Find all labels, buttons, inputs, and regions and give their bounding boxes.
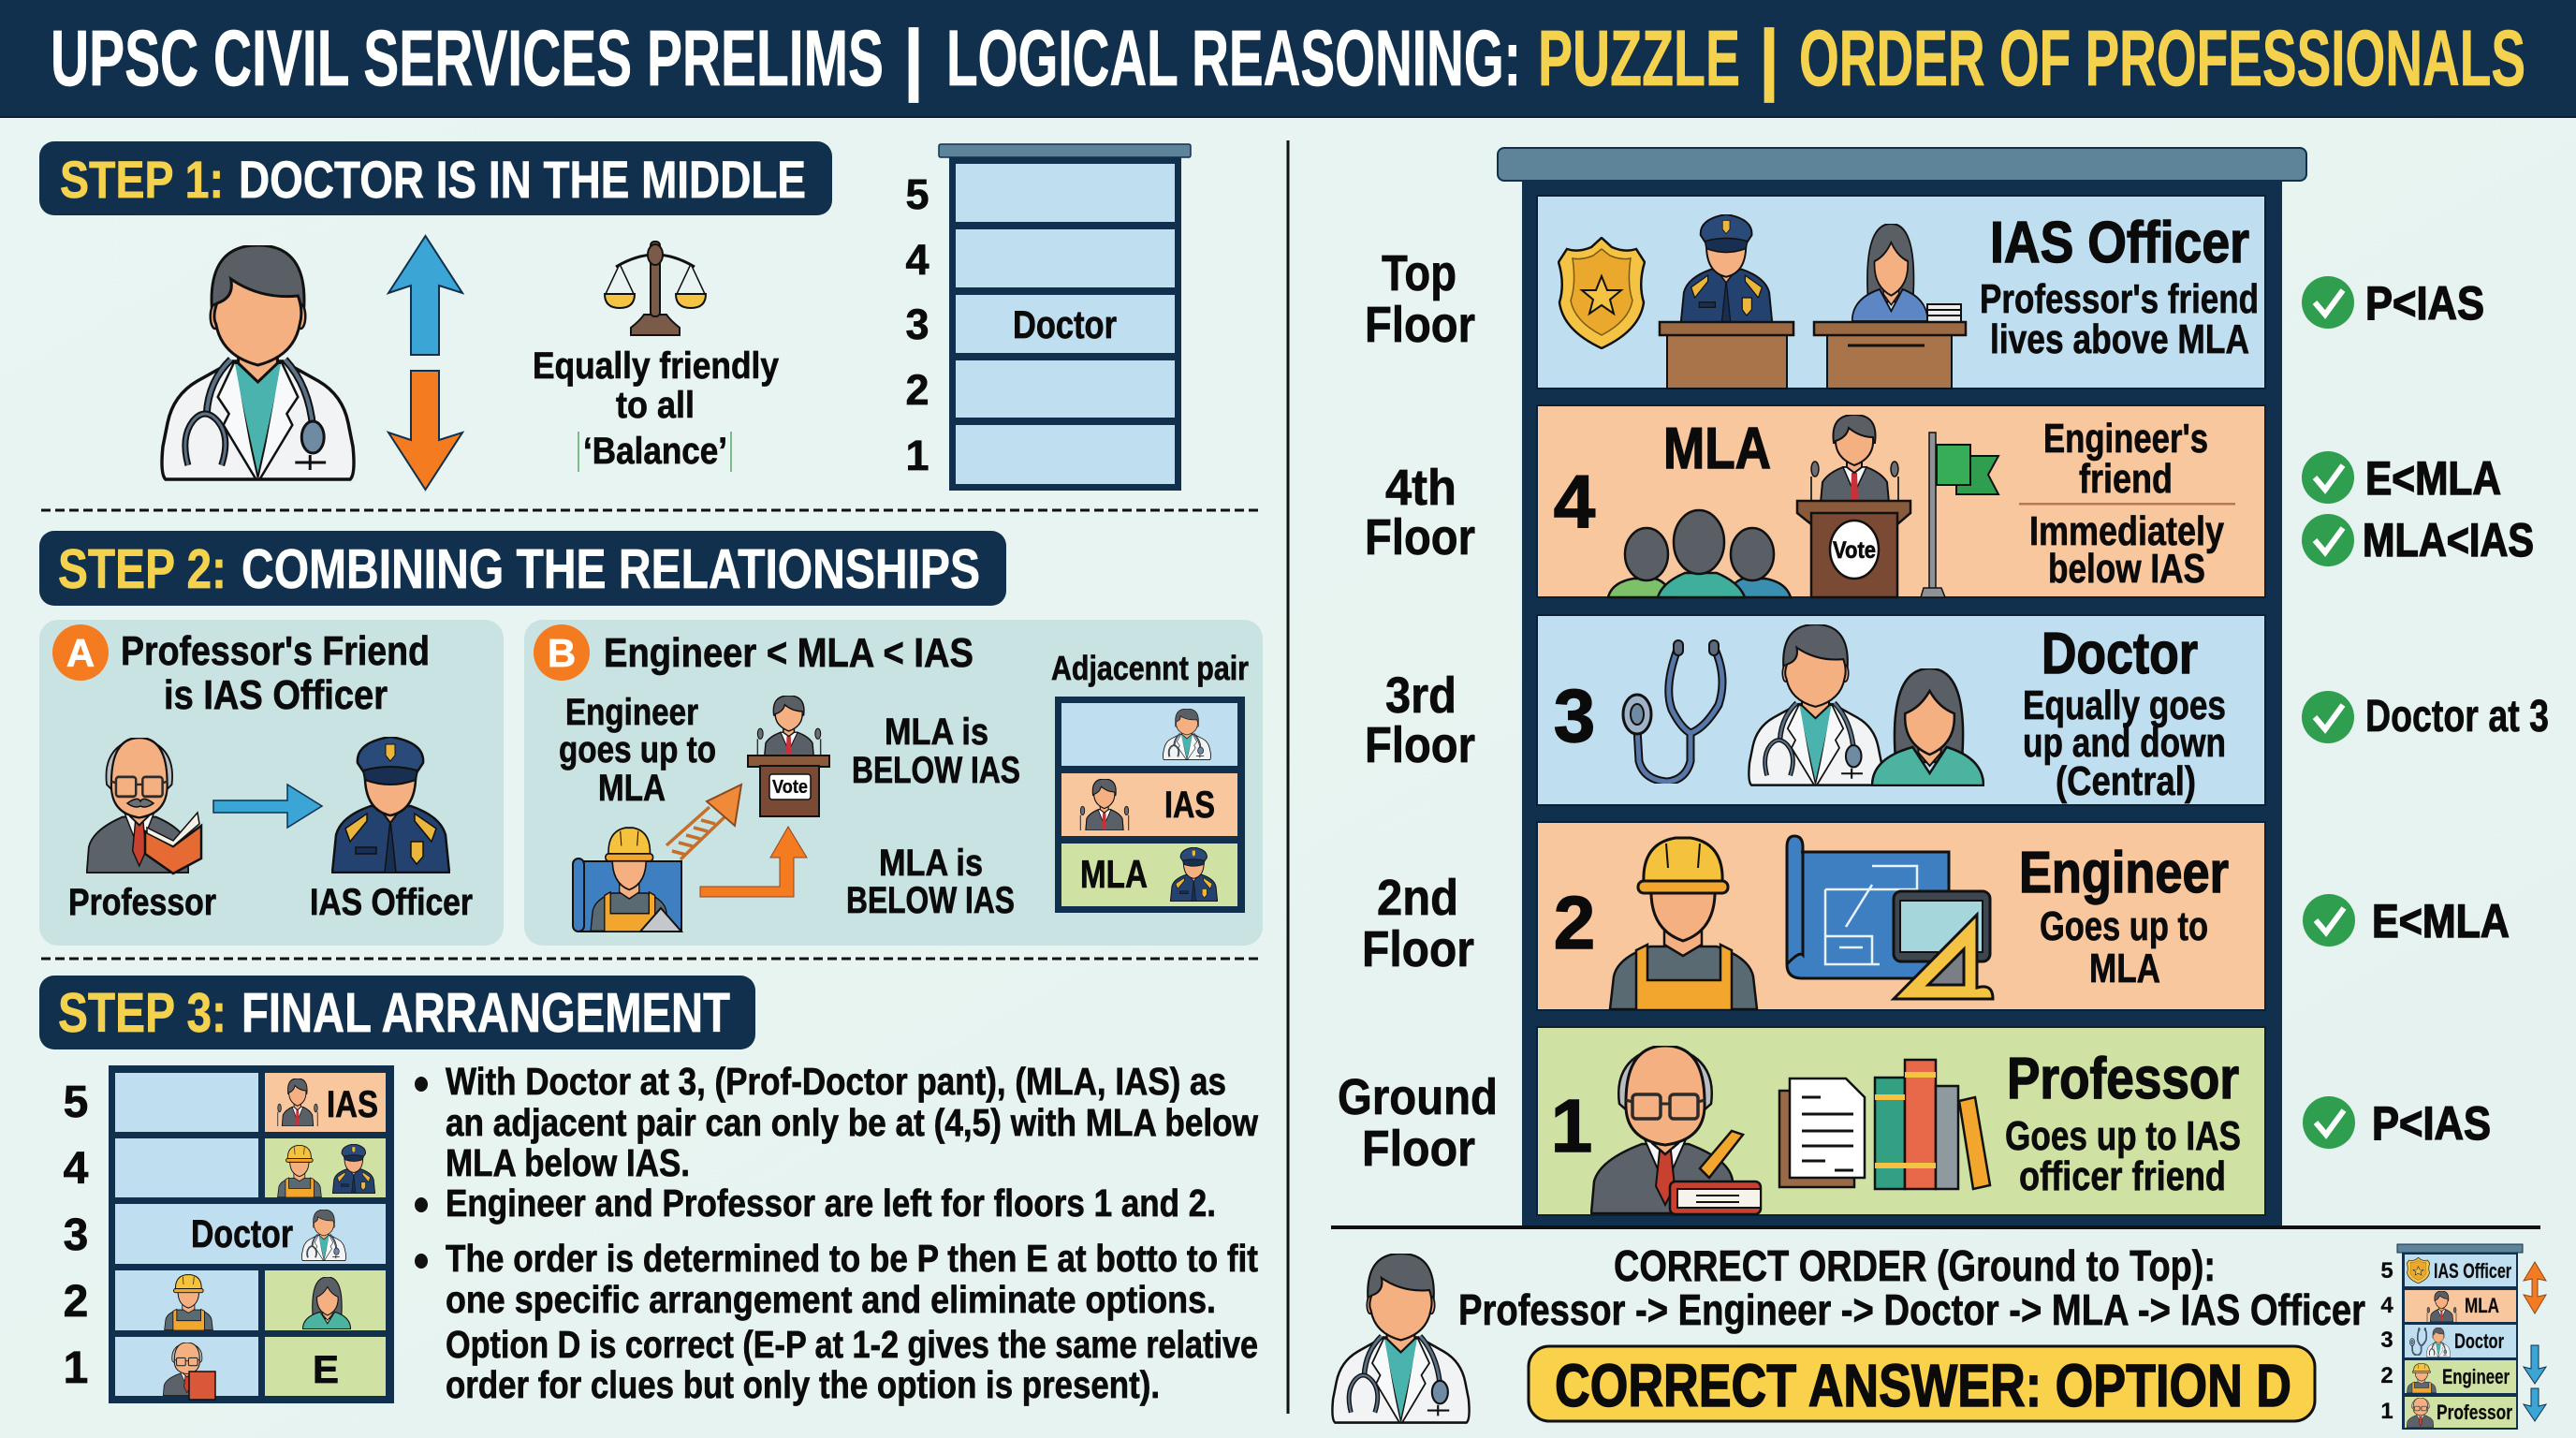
floor 5 text: Professor's friend — [1980, 276, 2259, 322]
icon: doctor — [1749, 624, 1882, 785]
icon: engineer — [1610, 838, 1757, 1010]
icon: IAS officer — [332, 737, 449, 873]
explanation text: one specific arrangement and eliminate options. — [446, 1278, 1216, 1321]
arrow: down — [388, 371, 462, 490]
text: MLA below IAS repeated: BELOW IAS — [846, 880, 1015, 921]
check: E less than MLA second — [2303, 894, 2510, 947]
title banner: UPSC CIVIL SERVICES PRELIMS — [51, 14, 884, 102]
floor 3 text: Doctor — [2042, 622, 2198, 686]
explanation text: MLA below IAS. — [446, 1141, 690, 1184]
floor label: 4th — [1365, 460, 1475, 565]
panel A: professor's friend — [39, 620, 504, 946]
building: tower structure — [1498, 148, 2306, 1227]
check: MLA less than IAS — [2302, 514, 2534, 566]
floor 5: IAS officer — [1537, 196, 2265, 389]
mini building summary — [2380, 1244, 2523, 1430]
floor label: 3rd: Floor — [1365, 717, 1475, 773]
floor 3 text: Equally goes — [2023, 682, 2226, 728]
icon: MLA at podium — [748, 696, 829, 816]
mini building summary: 5 — [2380, 1258, 2393, 1284]
icon: paper — [1779, 1078, 1865, 1187]
explanation text: Option D is correct (E-P at 1-2 gives the same relative — [446, 1323, 1258, 1366]
floor chart: doctor at floor 3: 3 — [905, 301, 929, 348]
panel B: engineer, MLA, IAS — [524, 620, 1263, 946]
check: P less than IAS — [2302, 276, 2484, 330]
text: engineer goes up: Engineer — [565, 692, 698, 733]
badge B — [534, 624, 590, 681]
floor 1 text: officer friend — [2019, 1153, 2226, 1199]
final arrangement grid: 4 — [64, 1144, 89, 1194]
arrow: to MLA — [700, 827, 807, 897]
icon: engineer with blueprint — [573, 828, 681, 932]
floor 2 text: Engineer — [2019, 841, 2229, 905]
adjacent pair chart: MLA — [1080, 852, 1148, 896]
floor 4 text: Immediately — [2029, 508, 2224, 554]
mini building summary: 4 — [2380, 1293, 2393, 1318]
text: engineer goes up — [559, 692, 716, 809]
floor 4 text — [2019, 416, 2235, 592]
floor label: 3rd — [1365, 668, 1475, 773]
step 2 heading: COMBINING THE RELATIONSHIPS — [242, 538, 980, 600]
title banner: | — [903, 14, 924, 103]
heading A: is IAS Officer — [164, 672, 388, 718]
number 1: 1 — [1551, 1084, 1592, 1167]
icon: MLA at podium with vote — [1797, 415, 1910, 597]
text: equally friendly to all — [533, 345, 780, 472]
floor 3 text: (Central) — [2056, 758, 2196, 804]
floor chart: doctor at floor 3: 1 — [905, 432, 929, 479]
correct answer callout: CORRECT ANSWER: OPTION D — [1555, 1352, 2291, 1419]
floor label: 2nd: 2nd — [1377, 870, 1458, 926]
floor chart: doctor at floor 3: Doctor — [1013, 302, 1117, 346]
final arrangement grid: IAS — [327, 1084, 378, 1125]
label: professor: Professor — [68, 882, 216, 923]
title banner: | — [1759, 14, 1779, 103]
arrow: professor to IAS — [213, 785, 322, 828]
mini building summary: Doctor — [2454, 1329, 2504, 1353]
check: E less than MLA: E<MLA — [2365, 452, 2501, 505]
mini building summary: 1 — [2380, 1399, 2393, 1424]
title banner: LOGICAL REASONING: — [946, 14, 1521, 102]
floor 4 text: Engineer's — [2043, 416, 2208, 462]
arrow: double orange — [2524, 1262, 2546, 1313]
correct order text: CORRECT ORDER (Ground to Top): — [1614, 1241, 2216, 1290]
final arrangement grid — [64, 1065, 394, 1403]
adjacent pair chart: IAS — [1164, 785, 1215, 826]
check: MLA less than IAS: MLA<IAS — [2363, 514, 2534, 566]
floor label: ground — [1338, 1069, 1498, 1177]
floor 2: engineer — [1537, 822, 2265, 1010]
correct order text: Professor -> Engineer -> Doctor -> MLA -> IAS Officer — [1458, 1285, 2365, 1334]
floor 4 text: friend — [2079, 456, 2173, 502]
floor 1: professor — [1537, 1027, 2265, 1215]
arrow: up — [388, 236, 462, 355]
floor 2 text — [2019, 841, 2229, 991]
icon: books — [1875, 1060, 1990, 1189]
floor label: 2nd — [1362, 870, 1474, 977]
floor 5 text: IAS Officer — [1990, 211, 2249, 275]
mini building summary: Engineer — [2442, 1365, 2510, 1388]
correct order text — [1458, 1241, 2365, 1334]
mini building summary: MLA — [2465, 1294, 2499, 1317]
check: P less than IAS second — [2303, 1096, 2491, 1150]
floor label: 3rd: 3rd — [1385, 668, 1456, 724]
text: equally friendly to all: ‘Balance’ — [583, 431, 727, 472]
label: adjacent pair: Adjacennt pair — [1051, 649, 1249, 687]
heading B: Engineer < MLA < IAS — [604, 630, 973, 676]
text: engineer goes up: goes up to — [559, 729, 716, 770]
step 1 heading — [39, 141, 832, 215]
floor 5 text — [1980, 211, 2259, 362]
heading A: Professor's Friend — [121, 628, 430, 674]
floor chart: doctor at floor 3: 2 — [905, 366, 929, 414]
text: equally friendly to all: to all — [616, 385, 695, 426]
icon: professor with book — [87, 738, 201, 873]
icon: audience — [1608, 510, 1791, 597]
icon: woman — [1872, 668, 1983, 785]
floor 3: doctor — [1537, 615, 2265, 805]
final arrangement grid: Doctor — [191, 1211, 293, 1255]
icon: woman at desk — [1814, 224, 1966, 389]
explanation text: Engineer and Professor are left for floors 1 and 2. — [446, 1181, 1216, 1225]
floor chart: doctor at floor 3: 5 — [905, 170, 929, 218]
step 1 heading: STEP 1: — [60, 150, 224, 209]
step 2 heading: STEP 2: — [58, 538, 227, 600]
text: MLA below IAS — [852, 712, 1020, 791]
arrow: blue down upper — [2524, 1345, 2546, 1384]
text: engineer goes up: MLA — [598, 768, 666, 809]
explanation text: With Doctor at 3, (Prof-Doctor pant), (MLA, IAS) as — [446, 1060, 1226, 1103]
adjacent pair chart — [1055, 697, 1245, 913]
floor 3 text — [2023, 622, 2226, 804]
arrow: blue down lower — [2524, 1388, 2546, 1421]
badge A — [52, 624, 109, 681]
icon: MLA at podium with vote: Vote — [1833, 537, 1876, 564]
icon: flag — [1921, 433, 1998, 597]
icon: IAS officer at desk — [1660, 214, 1793, 389]
floor 4 text: below IAS — [2048, 546, 2205, 592]
floor 4: MLA — [1537, 405, 2265, 597]
icon: professor with book and pencil — [1591, 1046, 1761, 1214]
mini building summary: 2 — [2380, 1363, 2393, 1388]
final arrangement grid: 3 — [64, 1211, 88, 1260]
check: doctor at 3 — [2302, 691, 2549, 743]
explanation text — [415, 1060, 1258, 1406]
icon: doctor — [162, 245, 354, 479]
heading A — [121, 628, 430, 718]
icon: balance scale — [605, 242, 706, 335]
mini building summary: 3 — [2380, 1328, 2393, 1353]
number 2: 2 — [1554, 881, 1595, 964]
floor label: top: Floor — [1365, 297, 1475, 353]
icon: MLA at podium: Vote — [772, 777, 808, 798]
floor 1 text — [2005, 1047, 2241, 1199]
floor chart: doctor at floor 3: 4 — [905, 236, 929, 284]
floor 3 text: up and down — [2023, 720, 2226, 766]
step 3 heading: FINAL ARRANGEMENT — [242, 982, 730, 1044]
explanation text: an adjacent pair can only be at (4,5) with MLA below — [446, 1101, 1258, 1144]
text: MLA below IAS: BELOW IAS — [852, 750, 1020, 791]
icon: gold badge — [1559, 238, 1645, 348]
title banner: PUZZLE — [1538, 14, 1740, 102]
badge B: B — [548, 631, 576, 675]
title banner — [0, 0, 2576, 118]
text: MLA below IAS repeated — [846, 843, 1015, 921]
icon: doctor summary — [1332, 1254, 1470, 1423]
floor label: 4th: 4th — [1385, 460, 1456, 516]
badge A: A — [66, 631, 95, 675]
icon: stethoscope — [1623, 640, 1722, 782]
floor label: 4th: Floor — [1365, 509, 1475, 565]
final arrangement grid: E — [313, 1347, 339, 1391]
text: MLA below IAS: MLA is — [885, 712, 988, 753]
explanation text: The order is determined to be P then E at botto to fit — [446, 1237, 1258, 1280]
text: MLA below IAS repeated: MLA is — [879, 843, 983, 884]
check: P less than IAS: P<IAS — [2365, 277, 2484, 330]
floor label: 2nd: Floor — [1362, 921, 1474, 977]
icon: blueprint, tablet and set square — [1787, 836, 1993, 999]
floor label: top: Top — [1382, 245, 1456, 301]
floor 2 text: Goes up to — [2040, 903, 2208, 949]
final arrangement grid: 1 — [64, 1343, 88, 1393]
text: equally friendly to all: Equally friendly — [533, 345, 780, 387]
check: P less than IAS second: P<IAS — [2372, 1097, 2491, 1150]
label: IAS officer: IAS Officer — [310, 882, 473, 923]
floor 5 text: lives above MLA — [1990, 316, 2249, 362]
floor chart: doctor at floor 3 — [905, 144, 1191, 491]
arrow: ladder up — [666, 785, 741, 859]
final arrangement grid: 5 — [64, 1078, 88, 1127]
floor 1 text: Goes up to IAS — [2005, 1113, 2241, 1159]
final arrangement grid: 2 — [64, 1277, 88, 1327]
mini building summary: Professor — [2437, 1401, 2512, 1424]
step 3 heading — [39, 976, 755, 1049]
step 2 heading — [39, 531, 1006, 606]
mini building summary: IAS Officer — [2434, 1259, 2511, 1283]
label: MLA: MLA — [1663, 417, 1771, 481]
explanation text: order for clues but only the option is present). — [446, 1363, 1160, 1406]
number 4: 4 — [1554, 460, 1596, 543]
step 3 heading: STEP 3: — [58, 982, 227, 1044]
check: E less than MLA — [2302, 451, 2501, 505]
floor label: top — [1365, 245, 1475, 353]
floor label: ground: Floor — [1362, 1121, 1475, 1177]
step 1 heading: DOCTOR IS IN THE MIDDLE — [239, 150, 806, 209]
number 3: 3 — [1554, 674, 1595, 757]
floor label: ground: Ground — [1338, 1069, 1498, 1125]
floor 1 text: Professor — [2007, 1047, 2239, 1111]
check: E less than MLA second: E<MLA — [2372, 895, 2510, 947]
floor 2 text: MLA — [2089, 946, 2160, 991]
